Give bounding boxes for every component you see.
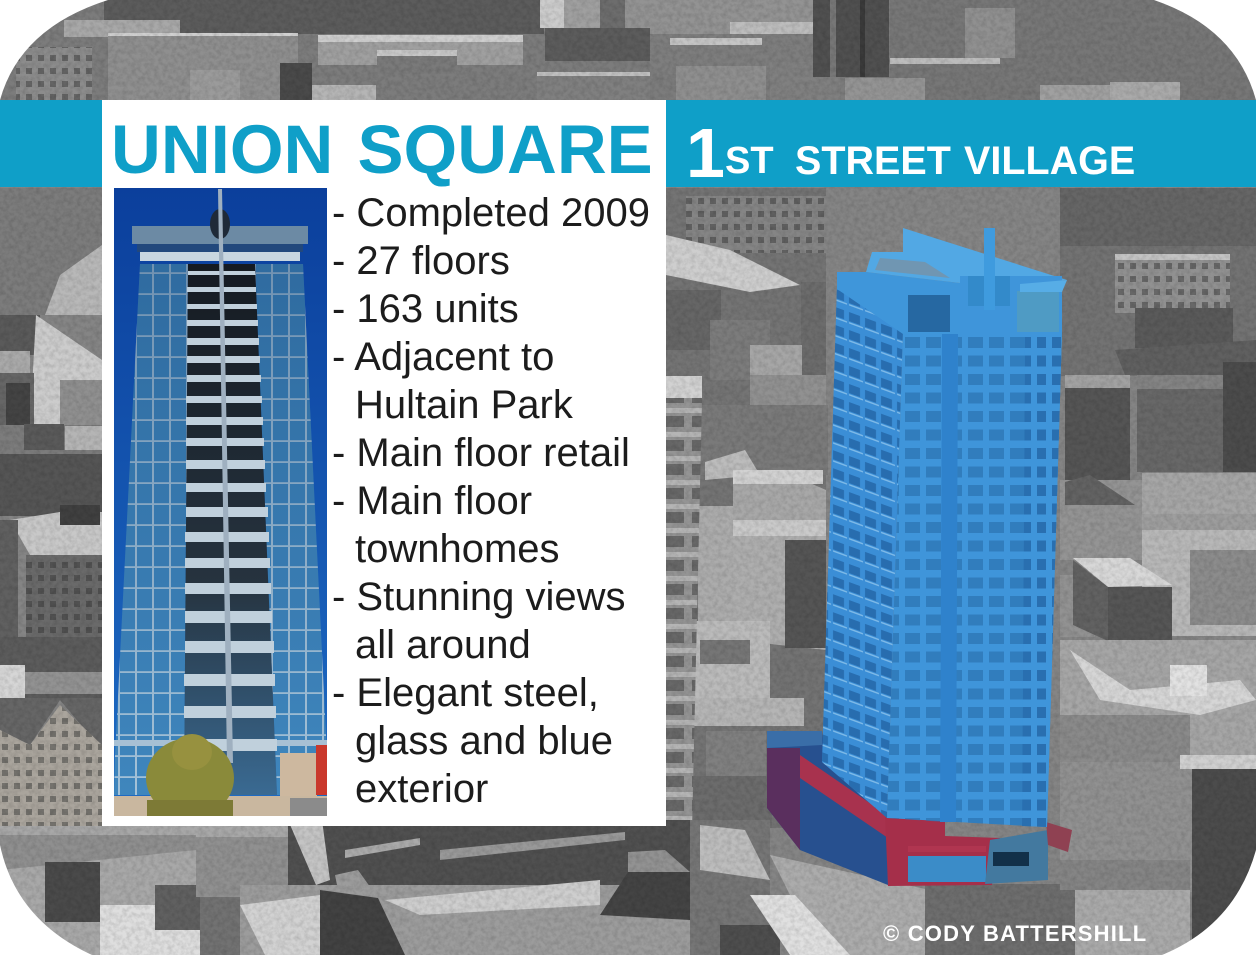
bottom rooftops and parking xyxy=(0,820,1190,955)
elevator penthouses xyxy=(320,850,690,955)
photo credit: © CODY BATTERSHILL xyxy=(883,921,1147,946)
fact list: - Elegant steel, xyxy=(332,671,599,715)
roof canopy and band xyxy=(132,226,308,261)
fact list: glass and blue xyxy=(355,719,613,763)
red podium xyxy=(767,731,1072,886)
top skyline buildings xyxy=(0,0,1256,100)
tower crown and roof xyxy=(837,228,1067,334)
fact list: Hultain Park xyxy=(355,383,573,427)
fact list: townhomes xyxy=(355,527,560,571)
balcony stack xyxy=(184,264,277,795)
highlighted blue tower xyxy=(767,228,1072,886)
far right buildings xyxy=(1060,188,1256,955)
spire xyxy=(210,189,233,763)
base and tree xyxy=(114,734,327,818)
subtitle: VILLAGE xyxy=(964,139,1135,183)
glass facades xyxy=(114,264,327,795)
fact list: - Completed 2009 xyxy=(332,191,650,235)
tower left face xyxy=(822,285,903,818)
teal band xyxy=(0,100,1256,187)
right side buildings near panel xyxy=(666,188,828,830)
neighbouring tall building xyxy=(666,376,702,830)
fact list: - Main floor xyxy=(332,479,532,523)
tower front face xyxy=(887,332,1062,827)
fact list: exterior xyxy=(355,767,488,811)
fact list: all around xyxy=(355,623,531,667)
left side buildings xyxy=(0,188,102,830)
subtitle: 1 xyxy=(686,114,725,192)
fact list: - Main floor retail xyxy=(332,431,630,475)
subtitle: STREET xyxy=(795,139,951,183)
subtitle xyxy=(686,114,1135,192)
fact list xyxy=(332,191,650,811)
fact list: - 163 units xyxy=(332,287,519,331)
fact list: - Stunning views xyxy=(332,575,625,619)
fact list: - Adjacent to xyxy=(332,335,554,379)
fact list: - 27 floors xyxy=(332,239,510,283)
title: UNION SQUARE xyxy=(111,111,653,188)
subtitle: ST xyxy=(725,140,774,182)
white info panel xyxy=(102,100,666,826)
tower photo xyxy=(114,188,327,816)
